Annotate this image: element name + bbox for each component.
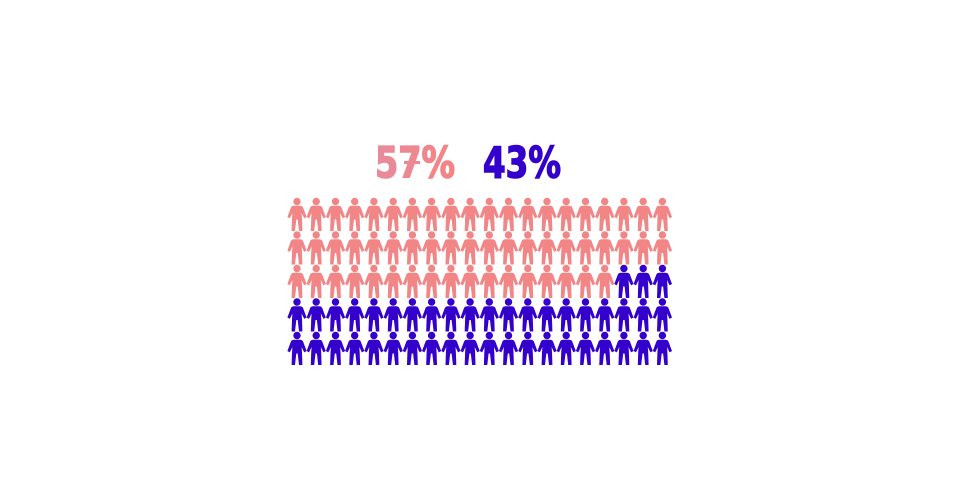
heading: 43%: 43% bbox=[483, 138, 561, 188]
pictogram: 57 pink figures bbox=[287, 198, 672, 298]
heading: 57%: 57% bbox=[375, 138, 455, 188]
pictogram: 43 blue figures bbox=[287, 265, 672, 365]
